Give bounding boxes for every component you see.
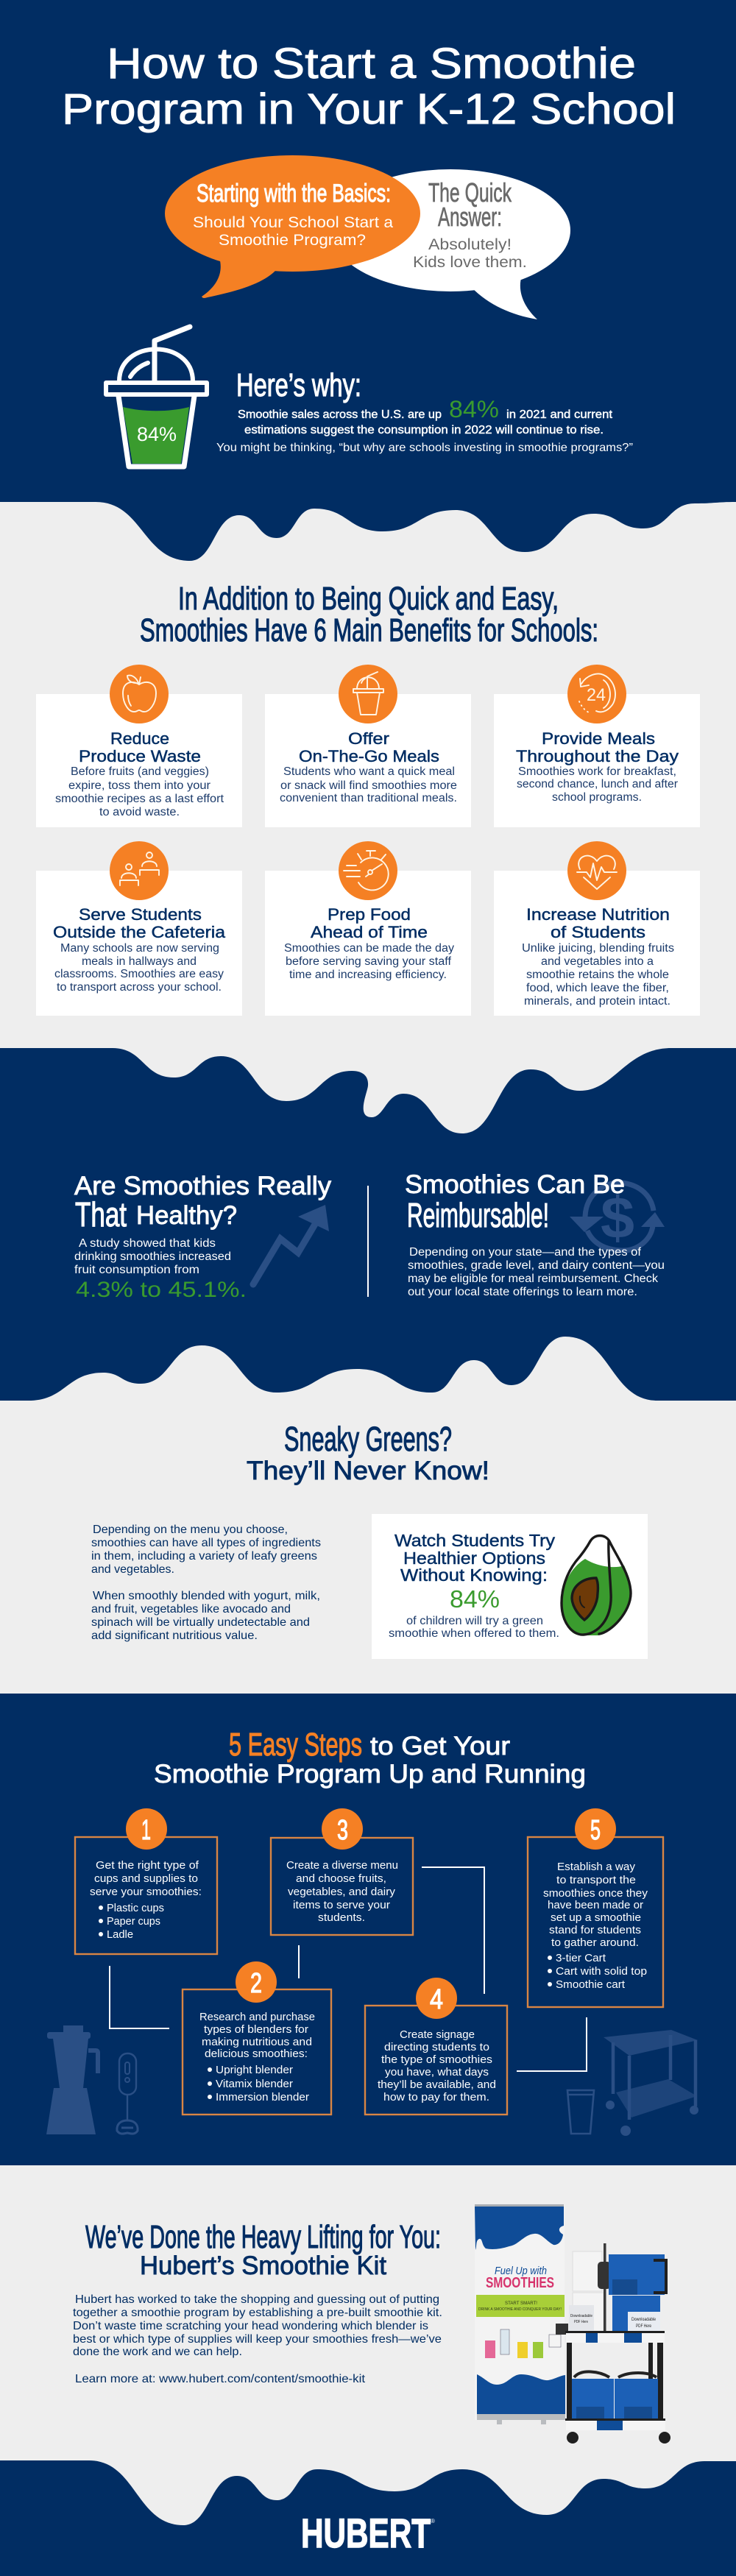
card: provide meals throughout the day: second chance, lunch and after <box>517 778 678 790</box>
heading: heavy lifting: We’ve Done the Heavy Lifting for You: <box>85 2219 441 2255</box>
card: serve students outside the cafeteria: meals in hallways and <box>82 955 197 968</box>
roll-up banner: DRINK A SMOOTHIE AND CONQUER YOUR DAY! <box>478 2307 562 2312</box>
step 3: vegetables, and dairy <box>288 1886 395 1898</box>
step 1: Ladle <box>107 1928 133 1941</box>
speech bubble: the quick answer: Kids love them. <box>413 254 527 271</box>
smoothie kit cart with supplies: PDF Here <box>574 2320 588 2324</box>
text block: smoothie kit body: best or which type of supplies will keep your smoothies fresh—we’ve <box>73 2333 442 2346</box>
text block: smoothie kit body: done the work and we can help. <box>73 2346 242 2358</box>
text block: are smoothies really that healthy: Healthy? <box>136 1201 237 1230</box>
card: reduce produce waste: smoothie recipes as a last effort <box>55 793 224 805</box>
card: increase nutrition of students: Unlike juicing, blending fruits <box>522 942 674 955</box>
panel: hero navy background with drips <box>0 0 736 561</box>
step 2: Immersion blender <box>216 2091 309 2103</box>
step 4: 4 <box>430 1984 443 2015</box>
card: provide meals throughout the day: school programs. <box>552 791 642 804</box>
text block: smoothies can be reimbursable <box>405 1170 665 1298</box>
text block: are smoothies really that healthy: Are Smoothies Really <box>74 1172 332 1200</box>
step 5: Cart with solid top <box>556 1965 647 1978</box>
text block: smoothie kit body: Learn more at: www.hubert.com/content/smoothie-kit <box>75 2373 366 2385</box>
icon: smoothie cup 84%: 84% <box>137 423 177 445</box>
card: serve students outside the cafeteria <box>36 841 242 1016</box>
roll-up banner: SMOOTHIES <box>486 2275 554 2291</box>
card: reduce produce waste: Before fruits (and veggies) <box>71 765 209 778</box>
heading: heavy lifting <box>85 2219 441 2280</box>
text block: sneaky greens body: Depending on the menu you choose, <box>93 1524 288 1536</box>
text block: smoothie kit body <box>73 2293 442 2385</box>
card: prep food ahead of time: time and increasing efficiency. <box>289 969 447 981</box>
card: serve students outside the cafeteria: classrooms. Smoothies are easy <box>54 968 224 980</box>
card: serve students outside the cafeteria: Outside the Cafeteria <box>53 923 226 941</box>
step 2: 2 <box>250 1968 262 1999</box>
step 2: types of blenders for <box>204 2023 308 2036</box>
card: serve students outside the cafeteria: to transport across your school. <box>57 981 222 994</box>
speech bubble: starting with the basics: Smoothie Program? <box>219 232 366 249</box>
step 5: set up a smoothie <box>551 1911 641 1924</box>
card: increase nutrition of students: food, which leave the fiber, <box>526 982 669 994</box>
icon: heart pulse <box>577 856 617 889</box>
heading: six benefits: In Addition to Being Quick and Easy, <box>178 581 559 617</box>
card: provide meals throughout the day: Provide Meals <box>542 729 655 748</box>
step 5: Establish a way <box>557 1861 636 1873</box>
smoothie kit cart with supplies: PDF Here <box>636 2324 652 2329</box>
step 2 <box>183 1961 331 2115</box>
card: increase nutrition of students <box>494 841 700 1016</box>
text block: smoothie kit body: together a smoothie program by establishing a pre-built smoothie kit. <box>73 2307 442 2319</box>
panel: five steps navy background <box>0 1694 736 2165</box>
icon: immersion blender silhouette <box>117 2053 138 2134</box>
smoothie kit cart with supplies: Downloadable <box>631 2318 657 2322</box>
step 3: 3 <box>337 1815 348 1846</box>
text block: here's why <box>216 367 633 454</box>
heading: sneaky greens: Sneaky Greens? <box>284 1420 452 1458</box>
icon: dollar circular arrows watermark <box>570 1183 665 1250</box>
icon: to-go cup <box>353 672 383 715</box>
icon: dollar circular arrows watermark: $ <box>601 1185 634 1250</box>
step 5: to gather around. <box>551 1936 639 1949</box>
text block: smoothie kit body: Don’t waste time scratching your head wondering which blender is <box>73 2320 428 2332</box>
step 4: Create signage <box>400 2028 475 2041</box>
text block: smoothies can be reimbursable: Reimbursable! <box>407 1196 549 1234</box>
card: prep food ahead of time: Prep Food <box>328 905 411 924</box>
step 5: 3-tier Cart <box>556 1952 606 1964</box>
panel: navy band with drips <box>0 1048 736 1401</box>
heading: sneaky greens: They’ll Never Know! <box>247 1457 489 1485</box>
text block: are smoothies really that healthy: 4.3% to 45.1%. <box>76 1278 247 1302</box>
step 5: 5 <box>590 1815 601 1846</box>
card: watch students try healthier options: 84% <box>450 1585 500 1613</box>
text block: smoothies can be reimbursable: out your local state offerings to learn more. <box>408 1286 637 1298</box>
text block: smoothies can be reimbursable: smoothies, grade level, and dairy content—you <box>408 1259 665 1272</box>
step 3: and choose fruits, <box>296 1872 386 1885</box>
card: provide meals throughout the day: Throughout the Day <box>516 747 679 765</box>
card: reduce produce waste: expire, toss them into your <box>68 779 210 792</box>
step 3: items to serve your <box>293 1899 390 1911</box>
step 2: making nutritious and <box>202 2036 312 2048</box>
card: prep food ahead of time: before serving saving your staff <box>286 955 452 968</box>
step 4: the type of smoothies <box>381 2053 492 2066</box>
heading: six benefits <box>140 581 598 648</box>
step 3 <box>271 1808 413 1935</box>
step 5: to transport the <box>556 1874 636 1886</box>
text block: sneaky greens body: in them, including a variety of leafy greens <box>91 1550 317 1563</box>
card: offer on-the-go meals: convenient than traditional meals. <box>280 792 457 804</box>
step 4: how to pay for them. <box>383 2091 489 2103</box>
step 3: Create a diverse menu <box>286 1859 398 1872</box>
card: watch students try healthier options: smoothie when offered to them. <box>389 1627 559 1640</box>
text block: smoothie kit body: Hubert has worked to take the shopping and guessing out of putting <box>75 2293 439 2306</box>
step 5: smoothies once they <box>543 1887 648 1900</box>
card: serve students outside the cafeteria: Many schools are now serving <box>60 942 219 955</box>
speech bubble: starting with the basics: Should Your School Start a <box>193 214 393 231</box>
text block: are smoothies really that healthy: That <box>75 1195 127 1234</box>
text block: here's why: estimations suggest the consumption in 2022 will continue to rise. <box>244 424 604 436</box>
step 1: 1 <box>141 1815 151 1846</box>
step 1 <box>75 1808 217 1954</box>
icon: avocado <box>562 1535 631 1635</box>
logo: Hubert: HUBERT <box>301 2510 431 2556</box>
step 3: students. <box>318 1911 365 1924</box>
step 4: they’ll be available, and <box>378 2078 496 2091</box>
icon: 24-hour clock: 24 <box>587 685 606 705</box>
text block: smoothies can be reimbursable: may be eligible for meal reimbursement. Check <box>408 1273 658 1285</box>
speech bubble: the quick answer: Answer: <box>438 202 502 232</box>
text block: here's why: Smoothie sales across the U.S. are up <box>238 408 442 421</box>
text block: sneaky greens body: smoothies can have all types of ingredients <box>91 1537 321 1549</box>
icon: cart silhouette <box>604 2030 698 2136</box>
card: increase nutrition of students: and vegetables into a <box>541 955 654 968</box>
smoothie kit cart with supplies: Downloadable <box>570 2314 592 2318</box>
divider <box>367 1186 369 1297</box>
text block: are smoothies really that healthy <box>74 1172 332 1302</box>
step 5: stand for students <box>549 1924 641 1936</box>
icon: 24-hour clock <box>579 674 615 713</box>
title: How to Start a Smoothie <box>107 40 636 88</box>
title <box>62 40 676 133</box>
text block: here's why: 84% <box>449 396 499 422</box>
speech bubble: the quick answer <box>330 169 570 319</box>
card: watch students try healthier options: Without Knowing: <box>400 1565 548 1585</box>
smoothie kit cart with supplies <box>556 2243 670 2444</box>
card: watch students try healthier options: Healthier Options <box>403 1549 545 1568</box>
card: offer on-the-go meals: Students who want a quick meal <box>283 765 455 778</box>
step 4: you have, what days <box>385 2066 489 2078</box>
speech bubble: the quick answer: Absolutely! <box>428 236 512 253</box>
text block: are smoothies really that healthy: A study showed that kids <box>79 1237 216 1250</box>
text block: sneaky greens body: spinach will be virtually undetectable and <box>91 1616 310 1629</box>
step 1: Plastic cups <box>107 1902 164 1914</box>
card: prep food ahead of time: Ahead of Time <box>311 923 428 941</box>
card: serve students outside the cafeteria: Serve Students <box>79 905 202 924</box>
text block: sneaky greens body: When smoothly blended with yogurt, milk, <box>93 1590 320 1602</box>
connectors between steps <box>110 1867 587 2071</box>
step 1: Paper cups <box>107 1915 160 1928</box>
logo: Hubert: ® <box>431 2518 435 2524</box>
title: Program in Your K-12 School <box>62 85 676 133</box>
icon: apple <box>123 676 156 712</box>
card: prep food ahead of time: Smoothies can be made the day <box>284 942 454 955</box>
icon: smoothie cup 84% <box>106 327 207 467</box>
heading: five easy steps <box>154 1727 586 1788</box>
text block: sneaky greens body: and vegetables. <box>91 1563 174 1576</box>
card: offer on-the-go meals: On-The-Go Meals <box>299 747 439 765</box>
heading: five easy steps: to Get Your <box>370 1732 510 1761</box>
card: increase nutrition of students: minerals, and protein intact. <box>524 995 670 1008</box>
icon: glass silhouette <box>567 2090 594 2134</box>
card: offer on-the-go meals: Offer <box>348 729 389 748</box>
roll-up banner <box>475 2204 565 2424</box>
text block: here's why: in 2021 and current <box>506 408 613 421</box>
heading: five easy steps: 5 Easy Steps <box>229 1727 362 1763</box>
card: prep food ahead of time <box>265 841 471 1016</box>
step 1: Get the right type of <box>96 1859 199 1872</box>
roll-up banner: Fuel Up with <box>495 2265 547 2277</box>
icon: stopwatch <box>344 851 389 890</box>
icon: blender silhouette <box>46 2025 98 2134</box>
text block: smoothies can be reimbursable: Depending on your state—and the types of <box>409 1246 642 1259</box>
card: watch students try healthier options: of children will try a green <box>406 1615 543 1627</box>
text block: are smoothies really that healthy: fruit consumption from <box>74 1264 199 1276</box>
text block: here's why: You might be thinking, “but why are schools investing in smoothie programs?” <box>216 442 633 454</box>
card: reduce produce waste: Produce Waste <box>79 747 201 765</box>
card: reduce produce waste <box>36 665 242 827</box>
step 5 <box>528 1808 663 2007</box>
panel: footer navy with drips <box>0 2460 736 2576</box>
card: provide meals throughout the day: Smoothies work for breakfast, <box>518 765 676 778</box>
text block: smoothies can be reimbursable: Smoothies Can Be <box>405 1170 625 1199</box>
step 5: have been made or <box>548 1899 643 1911</box>
step 2: Research and purchase <box>199 2011 315 2023</box>
text block: sneaky greens body: add significant nutritious value. <box>91 1630 258 1642</box>
card: offer on-the-go meals: or snack will find smoothies more <box>280 779 457 792</box>
heading: five easy steps: Smoothie Program Up and Running <box>154 1760 586 1788</box>
step 2: Upright blender <box>216 2064 293 2076</box>
card: reduce produce waste: to avoid waste. <box>99 806 180 818</box>
step 5: Smoothie cart <box>556 1978 626 1991</box>
speech bubble: starting with the basics: Starting with the Basics: <box>197 180 391 208</box>
icon: students at desks <box>120 852 159 885</box>
step 4 <box>365 1978 507 2115</box>
icon: rising arrow watermark <box>253 1205 329 1284</box>
step 2: Vitamix blender <box>216 2078 293 2090</box>
text block: here's why: Here’s why: <box>236 367 361 403</box>
step 1: cups and supplies to <box>94 1872 198 1885</box>
roll-up banner: START SMART! <box>505 2301 537 2306</box>
text block: are smoothies really that healthy: drinking smoothies increased <box>74 1250 231 1263</box>
card: provide meals throughout the day <box>494 665 700 827</box>
card: increase nutrition of students: of Students <box>551 923 645 941</box>
card: increase nutrition of students: Increase Nutrition <box>526 905 670 924</box>
text block: sneaky greens body: and fruit, vegetables like avocado and <box>91 1603 291 1616</box>
card: watch students try healthier options <box>372 1514 648 1659</box>
speech bubble: starting with the basics <box>165 155 420 298</box>
text block: sneaky greens body <box>91 1524 321 1642</box>
heading: heavy lifting: Hubert’s Smoothie Kit <box>140 2251 386 2280</box>
step 4: directing students to <box>384 2041 489 2053</box>
heading: sneaky greens <box>247 1420 489 1485</box>
step 1: serve your smoothies: <box>90 1886 202 1898</box>
card: offer on-the-go meals <box>265 665 471 827</box>
step 2: delicious smoothies: <box>205 2048 308 2060</box>
card: watch students try healthier options: Watch Students Try <box>394 1531 556 1550</box>
card: increase nutrition of students: smoothie retains the whole <box>526 969 669 981</box>
speech bubble: the quick answer: The Quick <box>428 177 512 208</box>
card: reduce produce waste: Reduce <box>110 729 169 748</box>
